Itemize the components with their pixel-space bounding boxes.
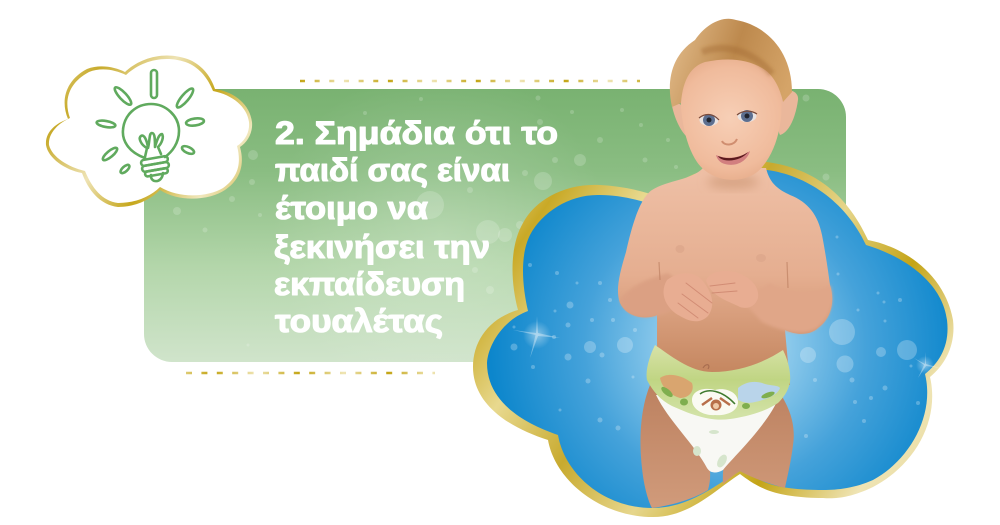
heading: εκπαίδευση [274,266,465,302]
heading: ξεκινήσει την [274,229,490,265]
baby legs [641,385,794,508]
blue cloud sparkles [510,236,920,438]
baby fingers [678,283,737,318]
diaper patch: monkey [692,389,738,415]
baby torso and arms [618,168,832,385]
heading [274,115,558,339]
baby face [681,50,782,180]
baby hair [670,19,792,107]
baby neck shadow [707,175,759,189]
baby eyes [699,110,757,126]
panel: green background [144,89,846,362]
baby ears [672,90,798,140]
diaper patch: lion [660,375,693,398]
dashed rule: bottom [186,372,435,374]
diaper patch: elephant [738,382,780,403]
icon: light bulb [96,70,204,181]
small gold-edged cloud [46,56,252,207]
large blue cloud with gold border [473,162,953,517]
green panel sparkles [173,94,830,351]
dashed rule: top [300,80,640,82]
baby left forearm [620,273,692,317]
heading: τουαλέτας [275,303,443,339]
baby hands [664,271,758,321]
sparkle star: left [513,316,560,358]
heading: παιδί σας είναι [275,152,510,188]
baby right forearm [742,283,832,333]
baby [618,19,832,508]
diaper [647,345,790,472]
diaper leaves [660,385,775,409]
heading: έτοιμο να [275,190,428,226]
diaper print [693,430,729,469]
baby mouth [716,151,750,165]
heading: 2. Σημάδια ότι το [275,115,558,151]
baby nose [722,139,737,145]
sparkle star: right [914,352,940,378]
baby navel [703,365,709,369]
baby arm creases [659,245,788,288]
